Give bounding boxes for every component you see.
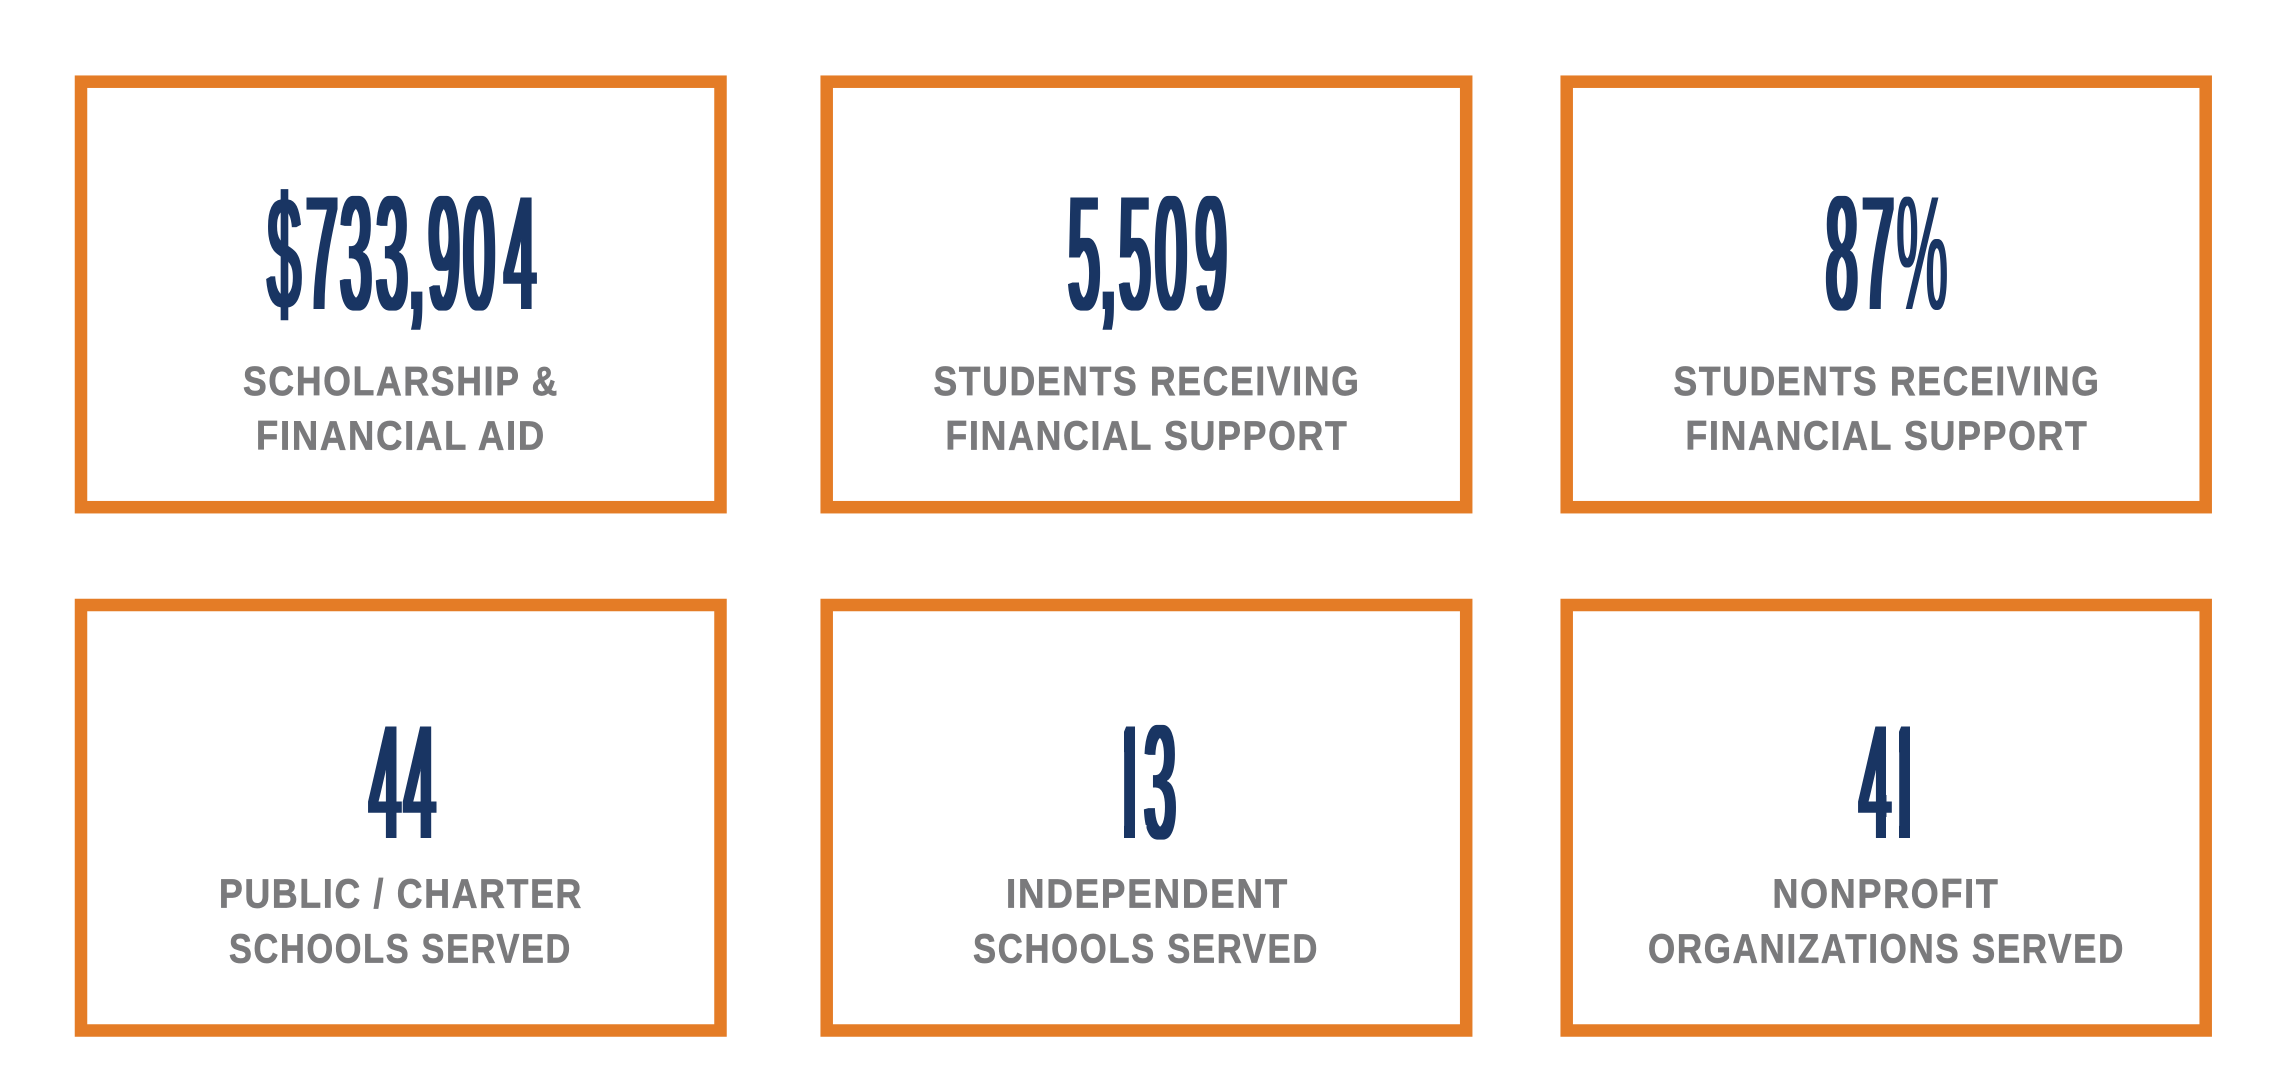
stat number: $733,904: $ xyxy=(268,162,301,343)
stat label: STUDENTS RECEIVING xyxy=(934,358,1360,404)
stat label: NONPROFIT xyxy=(1772,870,2000,916)
stat number: 41: 41 xyxy=(1860,691,1919,873)
panel border xyxy=(827,82,1466,507)
stat number: 13: 13 xyxy=(1113,691,1175,873)
stat label: ORGANIZATIONS SERVED xyxy=(1648,926,2125,972)
panel: students receiving financial support count xyxy=(827,82,1466,507)
stat label: INDEPENDENT xyxy=(1006,870,1289,916)
stat label: SCHOOLS SERVED xyxy=(229,926,572,972)
stat number: $733,904: 733,904 xyxy=(307,162,536,344)
stat number: 87%: % xyxy=(1896,163,1948,344)
panel: nonprofit organizations served xyxy=(1567,605,2206,1030)
stat label: FINANCIAL SUPPORT xyxy=(1686,412,2088,458)
panel border xyxy=(81,605,720,1030)
panel: independent schools served xyxy=(827,605,1466,1030)
stat number: 87% xyxy=(1826,162,1948,344)
panel: students receiving financial support percent xyxy=(1567,82,2206,507)
stat number: 5,509: 5,509 xyxy=(1069,162,1226,344)
stat label: STUDENTS RECEIVING xyxy=(1674,358,2100,404)
stat label xyxy=(243,358,559,458)
panel: public and charter schools served xyxy=(81,605,720,1030)
stat label xyxy=(1674,358,2100,458)
panel: scholarship and financial aid xyxy=(81,82,720,507)
stat label xyxy=(219,870,583,972)
stat label xyxy=(934,358,1360,458)
stat label: SCHOLARSHIP & xyxy=(243,358,559,404)
panel border xyxy=(1567,82,2206,507)
stat label: FINANCIAL AID xyxy=(256,412,546,458)
panel border xyxy=(1567,605,2206,1030)
stat label: SCHOOLS SERVED xyxy=(973,926,1319,972)
panel border xyxy=(827,605,1466,1030)
stat label: PUBLIC / CHARTER xyxy=(219,870,583,916)
stat label xyxy=(973,870,1319,972)
stat label: FINANCIAL SUPPORT xyxy=(946,412,1348,458)
stat label xyxy=(1648,870,2125,972)
stat number: 44: 44 xyxy=(370,691,435,873)
panel border xyxy=(81,82,720,507)
stat number: 87%: 87 xyxy=(1826,162,1893,344)
